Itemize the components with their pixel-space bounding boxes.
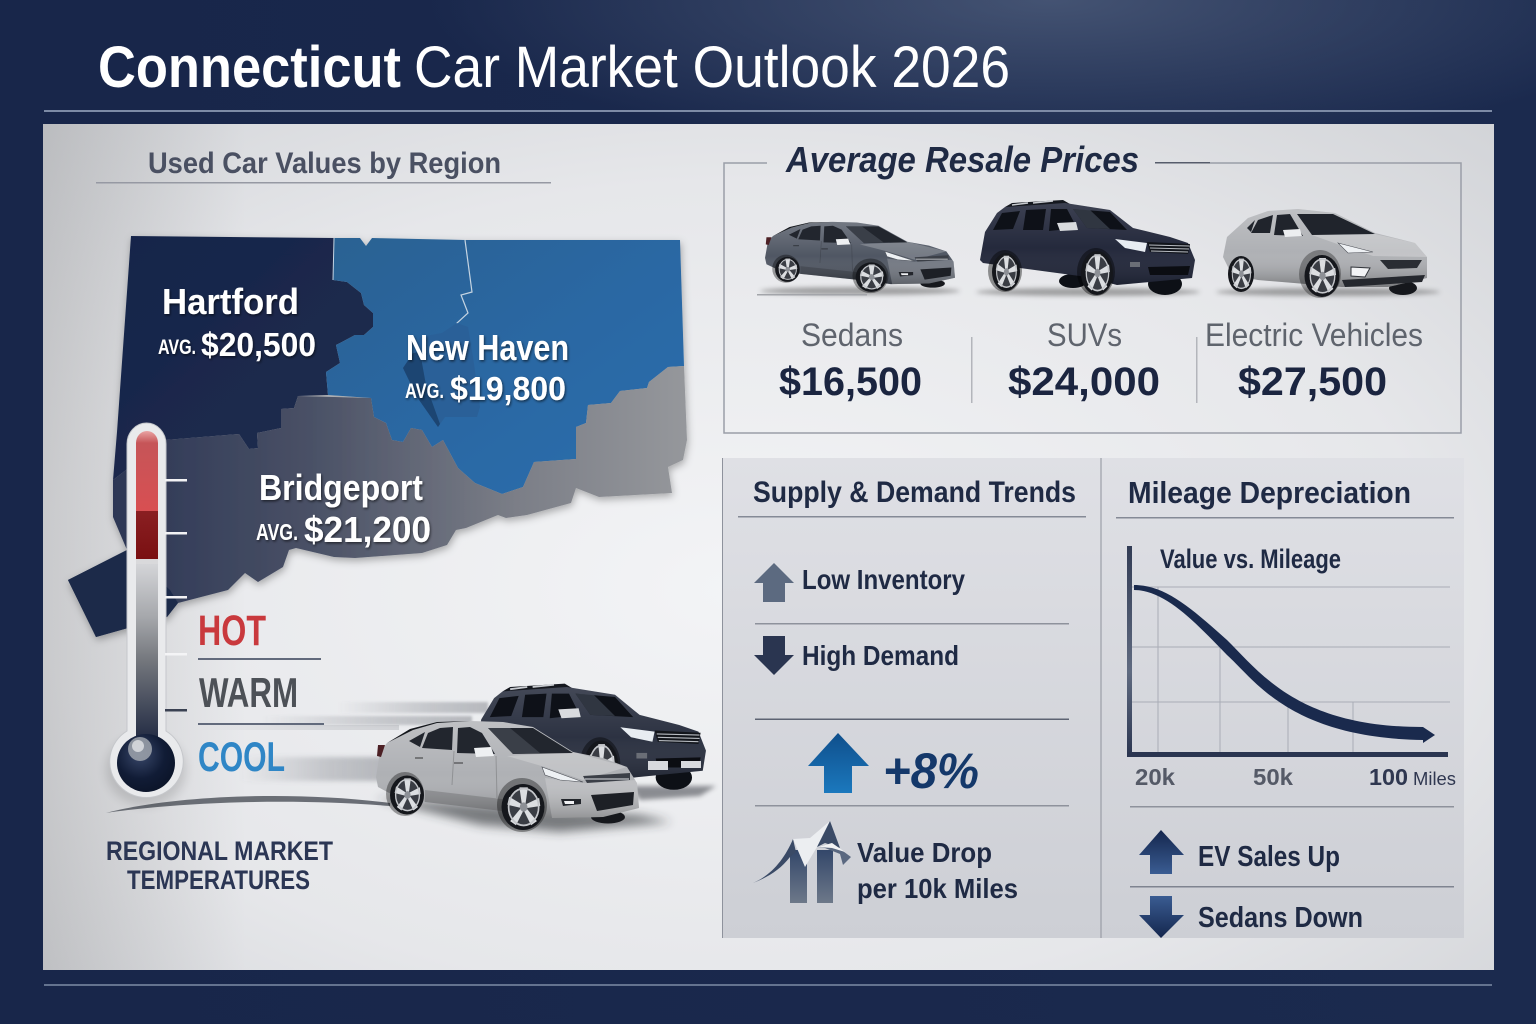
- car: SUV: [976, 200, 1200, 296]
- text: high demand: High Demand: [802, 640, 959, 671]
- axis labels: 20k: [1135, 764, 1175, 790]
- price: SUVs: [1008, 317, 1160, 404]
- legend: market temperature: HOT: [198, 607, 266, 655]
- heading: average resale prices: Average Resale Prices: [785, 139, 1139, 180]
- label: New Haven: New Haven: [406, 327, 569, 368]
- title remainder: Car Market Outlook 2026: [414, 35, 1010, 100]
- price: SUVs: SUVs: [1047, 317, 1122, 353]
- legend: market temperature: WARM: [199, 669, 298, 716]
- label: Bridgeport: [256, 467, 431, 550]
- caption: regional market temperatures: TEMPERATURES: [127, 865, 310, 895]
- icon: arrow up: [754, 563, 794, 602]
- icon: EV up arrow: [1139, 830, 1184, 874]
- panel: average resale prices: [724, 139, 1461, 433]
- motion streaks behind cars: [106, 702, 488, 813]
- price: electric vehicles: Electric Vehicles: [1205, 317, 1423, 353]
- thermometer: [106, 423, 187, 806]
- tick marks: [165, 479, 187, 712]
- text: EV sales up: EV Sales Up: [1198, 841, 1340, 873]
- title: Connecticut: [98, 35, 401, 100]
- label: New Haven: [405, 327, 569, 407]
- map of Connecticut: [68, 236, 687, 637]
- caption: regional market temperatures: [106, 836, 333, 895]
- car: electric vehicle: [1216, 209, 1440, 298]
- panel: used car values by region: [68, 147, 716, 895]
- label: Hartford: $20,500: [201, 326, 316, 363]
- label: New Haven: AVG.: [405, 380, 444, 403]
- chart title: Value vs. Mileage: [1160, 544, 1341, 574]
- heading: mileage depreciation: Mileage Depreciation: [1128, 475, 1411, 510]
- label: Bridgeport: Bridgeport: [259, 467, 423, 508]
- panel: supply and demand trends: [738, 476, 1086, 904]
- icon: big blue arrow up: [808, 733, 869, 793]
- region: panhandle: [68, 550, 178, 637]
- label: Hartford: AVG.: [158, 336, 196, 359]
- icon: value drop chart arrows: [753, 821, 851, 903]
- text: value drop per 10k miles: [857, 837, 1018, 904]
- caption: regional market temperatures: REGIONAL MARKET: [106, 836, 333, 866]
- text: value drop per 10k miles: Value Drop: [857, 837, 992, 868]
- heading: used car values: Used Car Values by Region: [148, 147, 501, 180]
- price: electric vehicles: $27,500: [1238, 360, 1387, 404]
- region: Hartford: [113, 236, 373, 480]
- axis labels: [1135, 764, 1456, 790]
- line chart: value vs mileage: [1127, 544, 1456, 790]
- heading: supply and demand: Supply & Demand Trends: [753, 476, 1076, 509]
- panel: mileage depreciation: [1116, 475, 1456, 938]
- label: Hartford: [158, 281, 316, 363]
- label: New Haven: $19,800: [450, 370, 566, 407]
- legend: market temperature: COOL: [198, 733, 285, 780]
- illustration: SUV and sedan: [375, 684, 716, 832]
- region: New Haven: [326, 238, 684, 494]
- text: low inventory: Low Inventory: [802, 564, 965, 595]
- price: SUVs: $24,000: [1008, 360, 1160, 404]
- legend: market temperature: [198, 607, 324, 780]
- label: Bridgeport: $21,200: [304, 509, 431, 550]
- axis labels: 50k: [1253, 764, 1293, 790]
- label: Bridgeport: AVG.: [256, 519, 298, 545]
- main panel: [43, 124, 1494, 970]
- axis labels: Miles: [1413, 769, 1456, 789]
- car: sedan: [757, 222, 960, 296]
- text: sedans down: Sedans Down: [1198, 902, 1363, 934]
- icon: arrow down: [754, 636, 794, 675]
- panel background: lower right: [722, 458, 1464, 938]
- price: sedans: Sedans: [801, 317, 903, 353]
- stat: plus eight percent: +8%: [883, 743, 979, 799]
- region: Bridgeport: [68, 366, 687, 637]
- price: electric vehicles: [1205, 317, 1423, 404]
- price: sedans: [779, 317, 922, 404]
- text: value drop per 10k miles: per 10k Miles: [857, 873, 1018, 904]
- axis labels: 100: [1369, 764, 1408, 790]
- label: Hartford: Hartford: [162, 281, 299, 322]
- icon: sedans down arrow: [1139, 896, 1184, 938]
- price: sedans: $16,500: [779, 360, 922, 404]
